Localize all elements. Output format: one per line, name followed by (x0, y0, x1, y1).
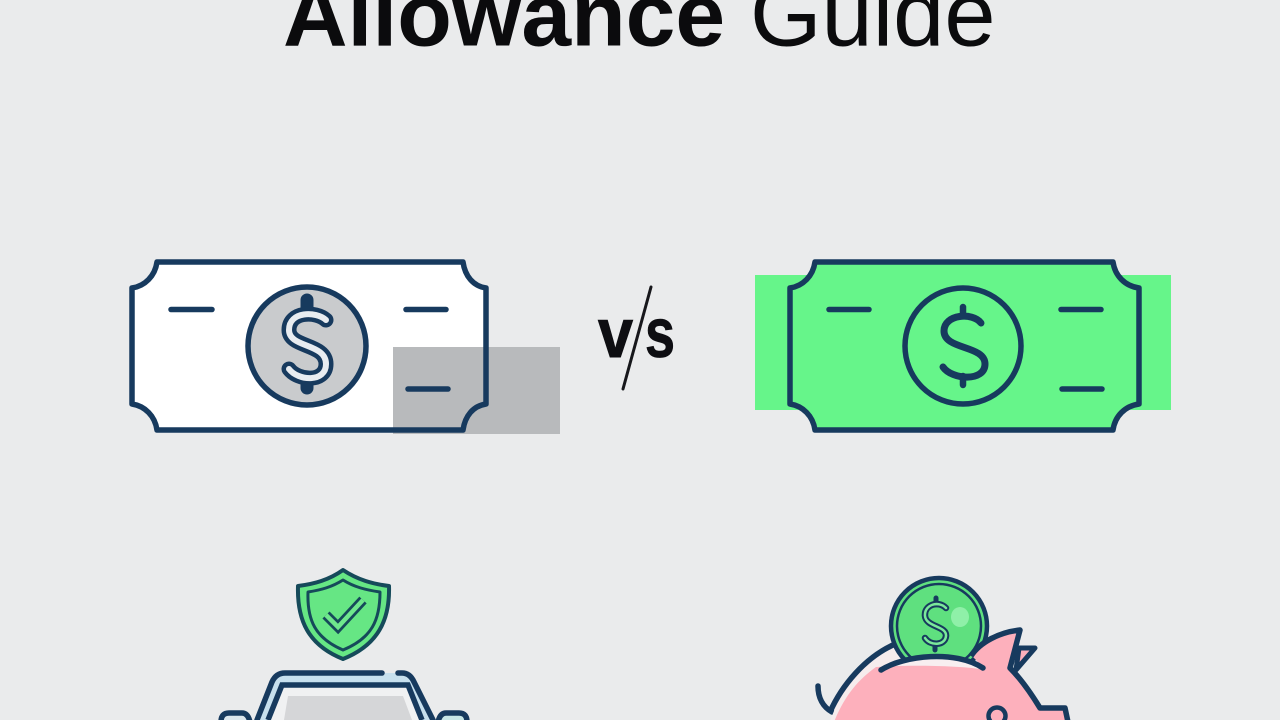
icon: piggy bank with coin (818, 578, 1068, 720)
label: versus (598, 287, 675, 389)
car mirrors (221, 713, 467, 720)
pig eye (988, 708, 1006, 720)
icon: car roof (221, 673, 467, 720)
pig body (834, 631, 1066, 720)
label: versus: s (645, 294, 675, 372)
icon: shield with check (298, 570, 389, 659)
icon: green dollar bill (755, 262, 1171, 430)
coin slot (881, 656, 983, 670)
pig tail (818, 686, 832, 712)
coin (891, 578, 987, 674)
title (283, 0, 996, 66)
small ear (1016, 648, 1035, 670)
pale body base (830, 645, 1010, 720)
slot highlight (881, 656, 983, 682)
icon: white dollar bill with grey block (132, 262, 560, 434)
label: versus: v (598, 294, 633, 372)
